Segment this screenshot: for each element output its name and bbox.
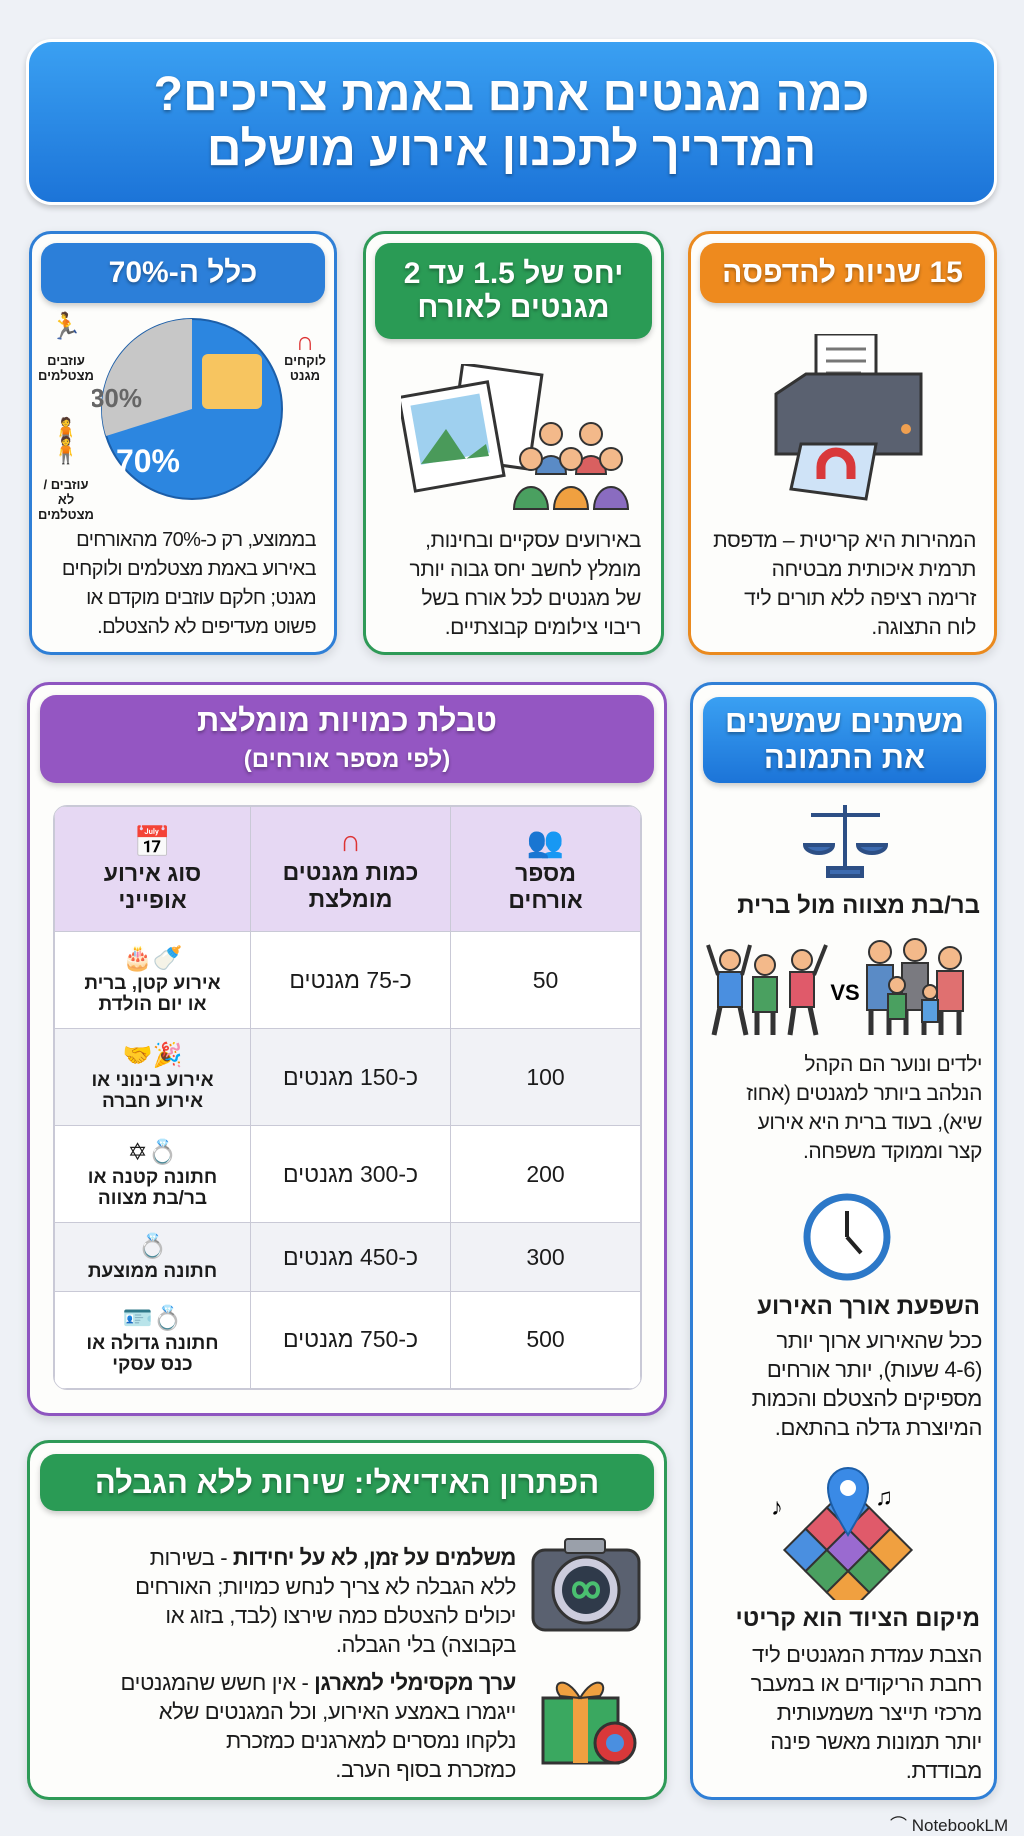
text: באירוע באמת מצטלמים ולוקחים	[62, 558, 316, 580]
text: max value	[121, 1670, 516, 1782]
panel: 15 seconds to print	[688, 231, 997, 655]
heading: unlimited: הפתרון האידיאלי: שירות ללא הגבלה	[95, 1465, 599, 1500]
table: 50	[533, 967, 558, 993]
icon: photos and crowd	[401, 364, 629, 510]
icon: printer	[774, 334, 922, 501]
text: max value: ערך מקסימלי למארגן - אין חשש שהמגנטים	[121, 1670, 516, 1695]
heading: variables	[703, 697, 986, 783]
label: not photographed: 🧍🧍	[50, 416, 82, 465]
label: takers: מגנט	[290, 368, 320, 383]
heading: variables: את התמונה	[764, 740, 925, 775]
table: סוג אירוע	[104, 860, 201, 886]
text	[62, 529, 316, 638]
heading: ratio: מגנטים לאורח	[417, 291, 610, 324]
text: pay for time: יכולים להצטלם כמה שירצו (לבד, בזוג או	[165, 1603, 516, 1628]
table: כ-750 מגנטים	[283, 1326, 418, 1352]
table: אורחים	[508, 886, 583, 912]
heading: 15 seconds	[700, 243, 985, 303]
table: מספר	[515, 860, 576, 886]
text: הנלהב ביותר למגנטים (אחוז	[746, 1082, 982, 1105]
text: pay for time: ללא הגבלה לא צריך לנחש כמויות; האורחים	[135, 1574, 516, 1599]
icon: location on dance floor	[771, 1467, 913, 1600]
text: יותר תמונות מאשר פינה	[770, 1729, 982, 1754]
table: אירוע בינוני או	[91, 1070, 214, 1091]
text: קצר וממוקד משפחה.	[803, 1140, 982, 1163]
table: 500	[526, 1326, 565, 1352]
panel: ratio per guest	[363, 231, 664, 655]
text: זרימה רציפה ללא תורים ליד	[744, 587, 976, 610]
heading: variables: משתנים שמשנים	[725, 704, 964, 739]
text: מספיקים להצטלם והכמות	[752, 1386, 982, 1411]
icon: clock	[804, 1194, 890, 1280]
panel: 70% rule	[29, 231, 337, 655]
table: כ-300 מגנטים	[283, 1161, 418, 1187]
label: leaving: 🏃	[50, 311, 82, 341]
table: ∩	[340, 825, 361, 858]
text: max value: ייגמרו באמצע האירוע, וכל המגנטים שלא	[159, 1699, 516, 1724]
label: leaving	[38, 311, 94, 383]
label: takers: ∩	[296, 326, 314, 356]
table: כ-150 מגנטים	[283, 1064, 418, 1090]
table: 🍼🎂	[123, 945, 182, 972]
text	[746, 1053, 982, 1163]
text: ככל שהאירוע ארוך יותר	[777, 1328, 982, 1353]
table: 200	[526, 1161, 565, 1187]
text: הצבת עמדת המגנטים ליד	[752, 1642, 982, 1667]
text: לוח התצוגה.	[871, 616, 976, 639]
table: כ-450 מגנטים	[283, 1244, 418, 1270]
title: כמה מגנטים אתם באמת צריכים?	[154, 68, 869, 121]
title: המדריך לתכנון אירוע מושלם	[207, 123, 816, 176]
text	[713, 529, 976, 639]
text: פשוט מעדיפים לא להצטלם.	[97, 616, 316, 638]
text: המהירות היא קריטית – מדפסת	[713, 529, 976, 552]
subheading: length: השפעת אורך האירוע	[757, 1293, 980, 1320]
icon: youth vs family	[706, 938, 964, 1036]
label: not photographed: עוזבים /	[43, 477, 89, 492]
heading: ratio	[375, 243, 652, 339]
heading: 15 seconds: 15 שניות להדפסה	[722, 256, 963, 289]
table: או יום הולדת	[98, 994, 206, 1015]
text: pay for time: משלמים על זמן, לא על יחידות - בשירות	[150, 1545, 516, 1570]
label: leaving: עוזבים	[47, 353, 85, 368]
title	[26, 39, 997, 205]
heading: ratio: יחס של 1.5 עד 2	[404, 256, 623, 290]
label: leaving: מצטלמים	[38, 368, 94, 383]
table: 💍	[138, 1233, 167, 1260]
table: בר/בת מצווה	[98, 1188, 207, 1209]
table: 🎉🤝	[123, 1042, 182, 1069]
text: ילדים ונוער הם הקהל	[804, 1053, 982, 1076]
panel: ideal solution	[27, 1440, 667, 1800]
text: מרכזי תייצר משמעותית	[777, 1700, 982, 1725]
subheading: bar mitzvah vs brit: בר/בת מצווה מול ברית	[737, 892, 980, 919]
icon: gift	[542, 1682, 636, 1764]
text: מבודדת.	[906, 1758, 982, 1783]
icon: location on dance floor: ♪	[771, 1494, 783, 1521]
table: 300	[526, 1244, 565, 1270]
table: 📅	[134, 826, 171, 858]
icon: camera infinity	[532, 1538, 640, 1632]
text: ריבוי צילומים קבוצתיים.	[445, 616, 641, 639]
table: מומלצת	[309, 886, 392, 912]
table: 100	[526, 1064, 565, 1090]
heading: 70% rule	[41, 243, 325, 303]
table: אופייני	[118, 886, 187, 912]
text: מגנט; חלקם עוזבים מוקדם או	[86, 587, 316, 609]
text: (4-6 שעות), יותר אורחים	[767, 1357, 982, 1382]
table: 👥	[527, 826, 564, 858]
text	[752, 1328, 982, 1440]
text: באירועים עסקיים ובחינות,	[425, 529, 641, 552]
heading: table title	[40, 695, 654, 783]
table: חתונה גדולה או	[86, 1333, 219, 1354]
text: המיוצרת גדלה בהתאם.	[775, 1415, 982, 1440]
panel: recommended table	[27, 682, 667, 1416]
heading: table title: טבלת כמויות מומלצת	[197, 703, 497, 738]
table: חתונה קטנה או	[88, 1167, 217, 1188]
label: takers	[284, 326, 326, 383]
table: אירוע חברה	[102, 1091, 203, 1112]
icon: location on dance floor: ♫	[875, 1484, 893, 1511]
label: not photographed	[38, 416, 94, 522]
heading: table title: (לפי מספר אורחים)	[244, 746, 450, 773]
subheading: location: מיקום הציוד הוא קריטי	[735, 1605, 980, 1632]
label: not photographed: לא מצטלמים	[38, 492, 94, 522]
panel: variables	[690, 682, 997, 1800]
text: max value: נלקחו נמסרים למארגנים כמזכרת	[226, 1728, 516, 1753]
text: שיא), בעוד ברית היא אירוע	[758, 1111, 982, 1134]
text	[751, 1642, 982, 1783]
table: 💍🪪	[123, 1305, 182, 1332]
text: תרמית איכותית מבטיחה	[772, 558, 976, 581]
chart: pie 70/30: 70%	[116, 443, 180, 479]
text: pay for time: בקבוצה) בלי הגבלה.	[336, 1632, 516, 1657]
heading: unlimited	[40, 1454, 654, 1511]
label: takers: לוקחים	[284, 353, 326, 368]
table: כנס עסקי	[112, 1354, 193, 1375]
table: כמות מגנטים	[283, 859, 418, 885]
text	[410, 529, 641, 639]
text: pay for time	[135, 1545, 516, 1657]
footer: NotebookLM logo: ⌒ NotebookLM	[890, 1816, 1008, 1835]
icon: youth vs family: VS	[830, 980, 860, 1005]
table: חתונה ממוצעת	[88, 1261, 217, 1282]
table	[53, 805, 642, 1390]
table: 💍✡	[128, 1139, 178, 1166]
text: מומלץ לחשב יחס גבוה יותר	[410, 558, 641, 581]
text: רחבת הריקודים או במעבר	[751, 1671, 982, 1696]
text: max value: כמזכרת בסוף הערב.	[335, 1757, 516, 1782]
chart: pie 70/30	[92, 318, 283, 500]
table: כ-75 מגנטים	[289, 967, 412, 993]
table: אירוע קטן, ברית	[84, 973, 221, 994]
icon: scales	[803, 805, 888, 878]
heading: 70% rule: כלל ה-70%	[109, 256, 257, 289]
text: בממוצע, רק כ-70% מהאורחים	[76, 529, 316, 551]
text: של מגנטים לכל אורח בשל	[421, 587, 641, 610]
